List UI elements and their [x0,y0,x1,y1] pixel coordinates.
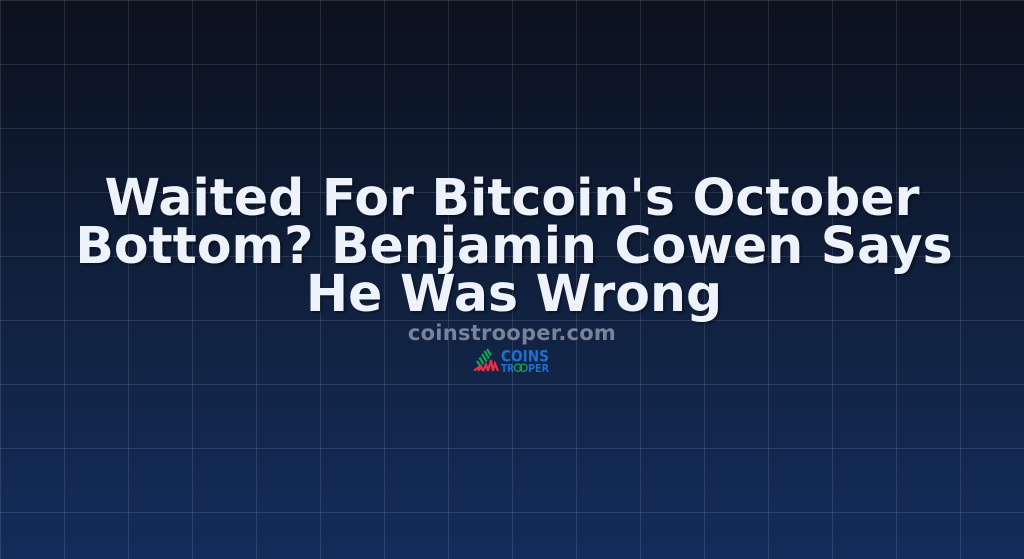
title [75,168,953,324]
logo: Coins Trooper [473,346,549,375]
logo wordmark: PER [528,362,549,375]
title: He Was Wrong [306,264,722,323]
logo wordmark [501,346,549,375]
icon: green and red chart mountain [474,349,498,371]
title: Bottom? Benjamin Cowen Says [75,216,953,274]
website label: coinstrooper.com [408,321,616,345]
logo wordmark: TR [501,362,514,375]
title: Waited For Bitcoin's October [104,168,919,227]
